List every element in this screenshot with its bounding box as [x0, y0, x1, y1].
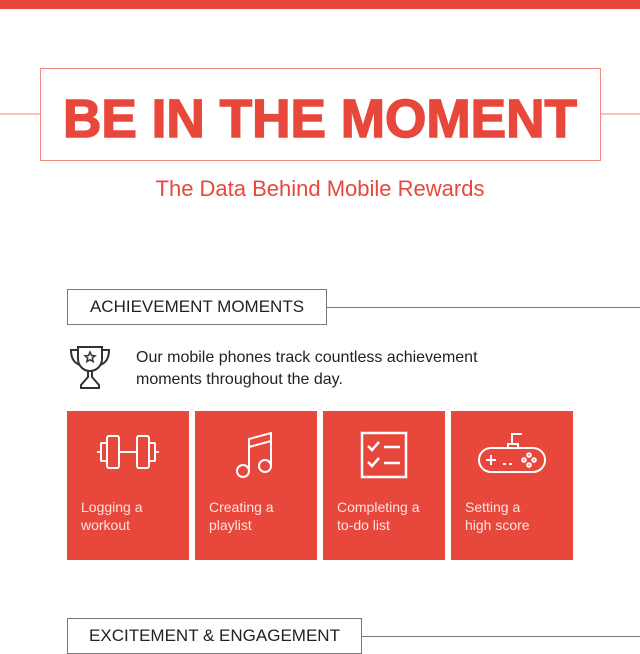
section header: excitement & engagement: EXCITEMENT & ENGAGEMENT [89, 626, 340, 645]
top bar [0, 0, 640, 9]
tile: playlist: playlist [209, 517, 252, 533]
tile: high score [451, 411, 573, 560]
tile: high score: high score [465, 517, 530, 533]
tile: workout [67, 411, 189, 560]
tile: workout: workout [81, 517, 130, 533]
section header: achievement moments: ACHIEVEMENT MOMENTS [90, 297, 304, 316]
tile: workout: Logging a [81, 499, 143, 515]
subtitle: The Data Behind Mobile Rewards [156, 176, 484, 201]
tile: to-do list [323, 411, 445, 560]
intro text: moments throughout the day. [136, 371, 343, 388]
tile: to-do list: to-do list [337, 517, 390, 533]
tile: playlist [195, 411, 317, 560]
title: BE IN THE MOMENT [63, 89, 577, 149]
intro text [136, 349, 478, 388]
tile: playlist: Creating a [209, 499, 274, 515]
title [0, 68, 640, 161]
icon: trophy [70, 346, 110, 389]
intro text: Our mobile phones track countless achievement [136, 349, 478, 366]
tile: high score: Setting a [465, 499, 520, 515]
tile: to-do list: Completing a [337, 499, 420, 515]
